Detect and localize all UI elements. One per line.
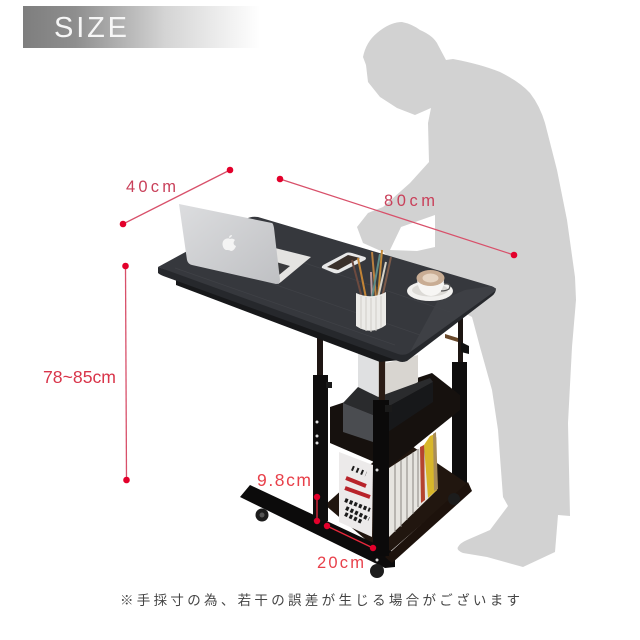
white box on shelf (358, 353, 418, 403)
base foot (240, 485, 395, 568)
dimension: 20cm (317, 523, 376, 572)
lower shelf (325, 438, 468, 556)
back leg (445, 318, 469, 490)
desk top (158, 217, 496, 362)
phone (322, 252, 366, 273)
banner: SIZE heading: SIZE (54, 12, 127, 44)
icon: apple logo (223, 235, 236, 251)
dimension: 80cm (277, 176, 517, 258)
casters (256, 493, 460, 578)
left post (313, 338, 332, 521)
printer on shelf (343, 378, 433, 442)
centre post (373, 358, 392, 562)
books row (389, 432, 438, 537)
dimension: 40cm (120, 167, 233, 227)
upper shelf (330, 373, 460, 468)
dimension: height 78~85cm (43, 263, 130, 483)
banner: SIZE heading (23, 6, 260, 48)
dimension: 40cm: 40cm (126, 178, 176, 196)
book cover (339, 452, 373, 537)
dimension: height 78~85cm: 78~85cm (43, 367, 116, 387)
person silhouette (357, 22, 576, 567)
pencil cup (356, 292, 386, 332)
dimension: 20cm: 20cm (317, 554, 364, 572)
dimension: 80cm: 80cm (384, 192, 435, 210)
desk frame and base (240, 318, 472, 578)
footnote: ※手採寸の為、若干の誤差が生じる場合がございます (120, 592, 520, 608)
coffee cup and saucer (407, 270, 453, 301)
dimension: 9.8cm (257, 470, 320, 524)
laptop (179, 204, 311, 284)
pencils (352, 250, 391, 298)
dimension: 9.8cm: 9.8cm (257, 470, 311, 490)
